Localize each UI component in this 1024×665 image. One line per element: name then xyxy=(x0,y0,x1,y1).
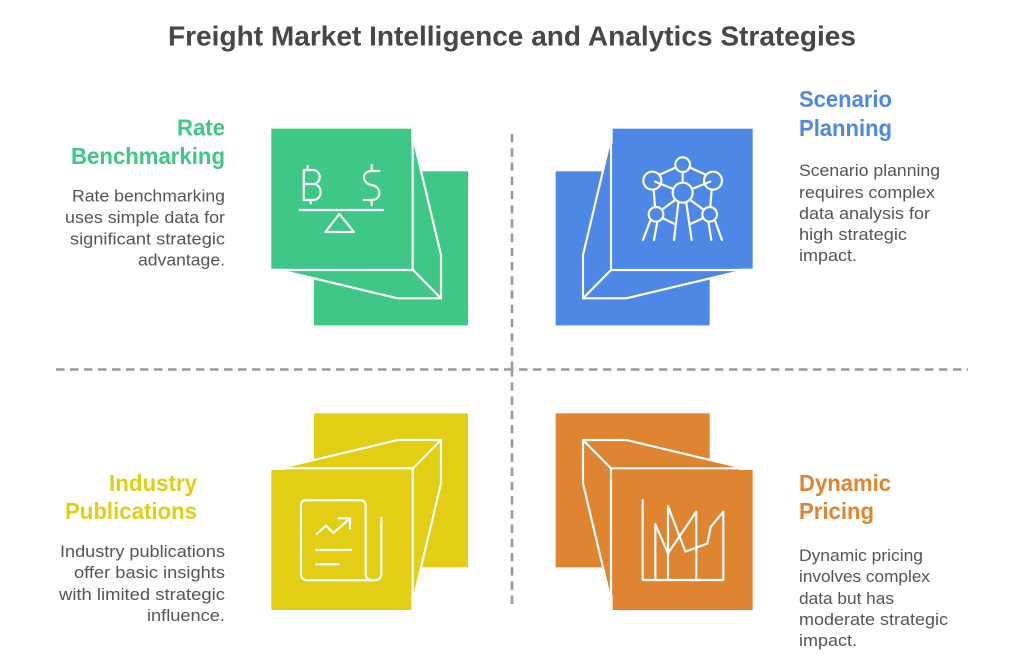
text: industry publications description: Industry publications xyxy=(60,542,225,561)
quadrant dividers xyxy=(56,134,968,604)
text: rate benchmarking description xyxy=(65,186,226,270)
heading: dynamic pricing: Dynamic xyxy=(799,470,891,496)
heading: industry publications xyxy=(65,470,197,524)
text: rate benchmarking description: advantage. xyxy=(138,250,225,270)
heading: dynamic pricing: Pricing xyxy=(799,498,874,524)
heading: scenario planning: Planning xyxy=(799,115,892,141)
heading: rate benchmarking xyxy=(71,114,225,169)
panel: industry publications cube xyxy=(271,413,468,610)
text: dynamic pricing description: moderate strategic xyxy=(799,610,949,629)
text: industry publications description: with limited strategic xyxy=(58,585,226,604)
icon: report with trend arrow xyxy=(301,500,381,580)
text: industry publications description: influence. xyxy=(147,606,225,625)
text: scenario planning description: high strategic xyxy=(799,225,908,244)
icon: bitcoin and dollar balance scale xyxy=(300,165,383,232)
text: rate benchmarking description: uses simple data for xyxy=(65,208,225,227)
text: scenario planning description xyxy=(799,161,940,265)
heading: industry publications: Industry xyxy=(109,470,197,496)
heading: industry publications: Publications xyxy=(65,498,197,524)
heading: rate benchmarking: Benchmarking xyxy=(71,143,225,169)
heading: scenario planning xyxy=(799,86,892,141)
text: industry publications description xyxy=(58,542,226,625)
text: dynamic pricing description: impact. xyxy=(799,631,857,650)
panel: rate benchmarking cube xyxy=(271,129,468,325)
text: dynamic pricing description xyxy=(799,546,949,650)
text: scenario planning description: Scenario planning xyxy=(799,161,940,180)
text: dynamic pricing description: data but has xyxy=(799,589,894,608)
icon: atom network xyxy=(643,157,722,240)
text: dynamic pricing description: Dynamic pricing xyxy=(799,546,923,565)
text: dynamic pricing description: involves complex xyxy=(799,567,930,586)
text: scenario planning description: impact. xyxy=(799,246,857,265)
title: Freight Market Intelligence and Analytics Strategies xyxy=(168,20,856,52)
panel: dynamic pricing cube xyxy=(556,413,753,610)
text: industry publications description: offer basic insights xyxy=(74,563,225,582)
text: rate benchmarking description: Rate benchmarking xyxy=(72,186,225,206)
icon: line chart xyxy=(643,500,723,580)
panel: scenario planning cube xyxy=(556,129,753,325)
heading: dynamic pricing xyxy=(799,470,891,524)
heading: scenario planning: Scenario xyxy=(799,86,892,112)
text: scenario planning description: data analysis for xyxy=(799,204,930,223)
text: scenario planning description: requires complex xyxy=(799,183,936,202)
heading: rate benchmarking: Rate xyxy=(177,114,225,140)
text: rate benchmarking description: significant strategic xyxy=(70,230,226,248)
